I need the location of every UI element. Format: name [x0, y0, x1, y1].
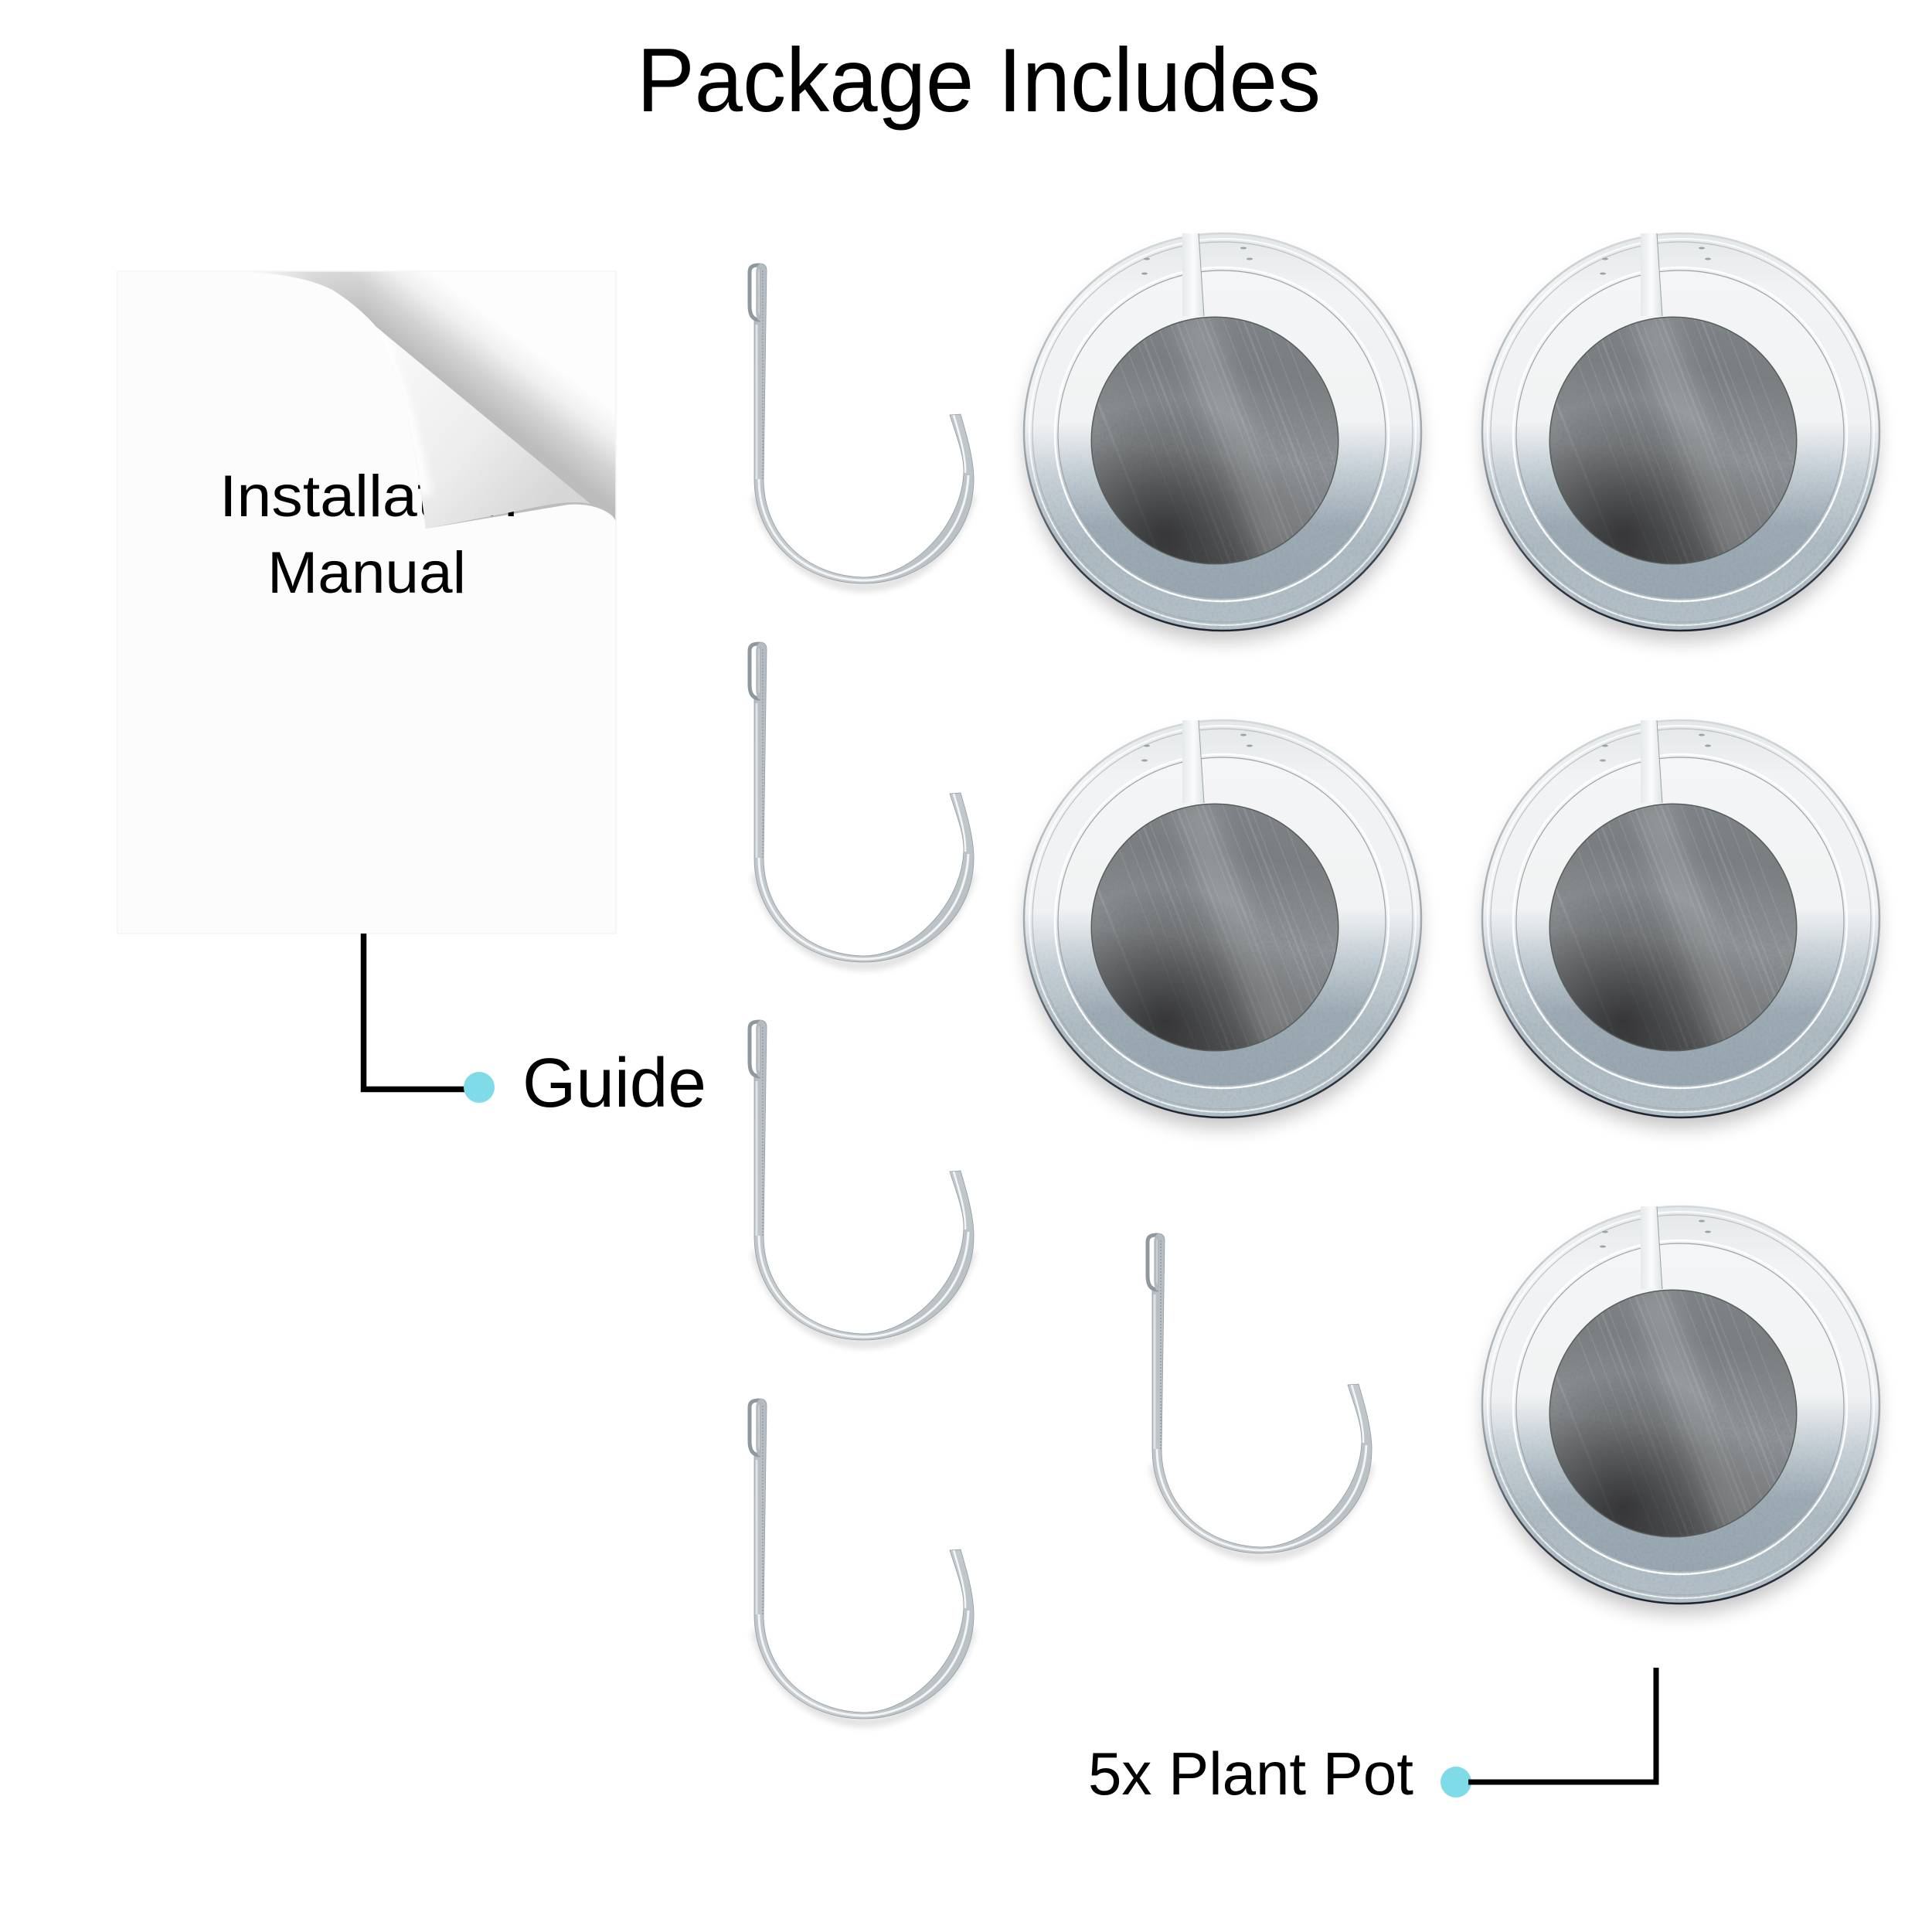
title: Package Includes — [637, 29, 1321, 131]
hook 4 — [750, 1399, 974, 1723]
label: plant pots: 5x Plant Pot — [1088, 1740, 1413, 1808]
page back with curl shadow — [117, 271, 616, 934]
manual heading text: Installation — [219, 464, 518, 529]
hook 2 — [750, 642, 974, 966]
page outline — [117, 271, 616, 934]
leader line: plant pots — [1468, 1668, 1656, 1782]
plant pot 1 — [1024, 233, 1421, 641]
page front — [117, 271, 616, 934]
leader line: guide — [363, 934, 471, 1090]
plant pot 2 — [1482, 233, 1879, 641]
marker dot: guide — [464, 1072, 495, 1103]
hook 3 — [750, 1020, 974, 1344]
manual heading text — [219, 464, 518, 606]
plant pot 4 — [1482, 720, 1879, 1128]
page curl flap — [376, 327, 590, 529]
label: guide: Guide — [522, 1045, 706, 1122]
marker dot: plant pots — [1440, 1767, 1471, 1798]
hook 5 — [1148, 1233, 1372, 1557]
manual heading text: Manual — [267, 540, 466, 606]
hook 1 — [750, 264, 974, 587]
plant pot 3 — [1024, 720, 1421, 1128]
plant pot 5 — [1482, 1206, 1879, 1614]
panel: installation manual page — [117, 271, 616, 934]
